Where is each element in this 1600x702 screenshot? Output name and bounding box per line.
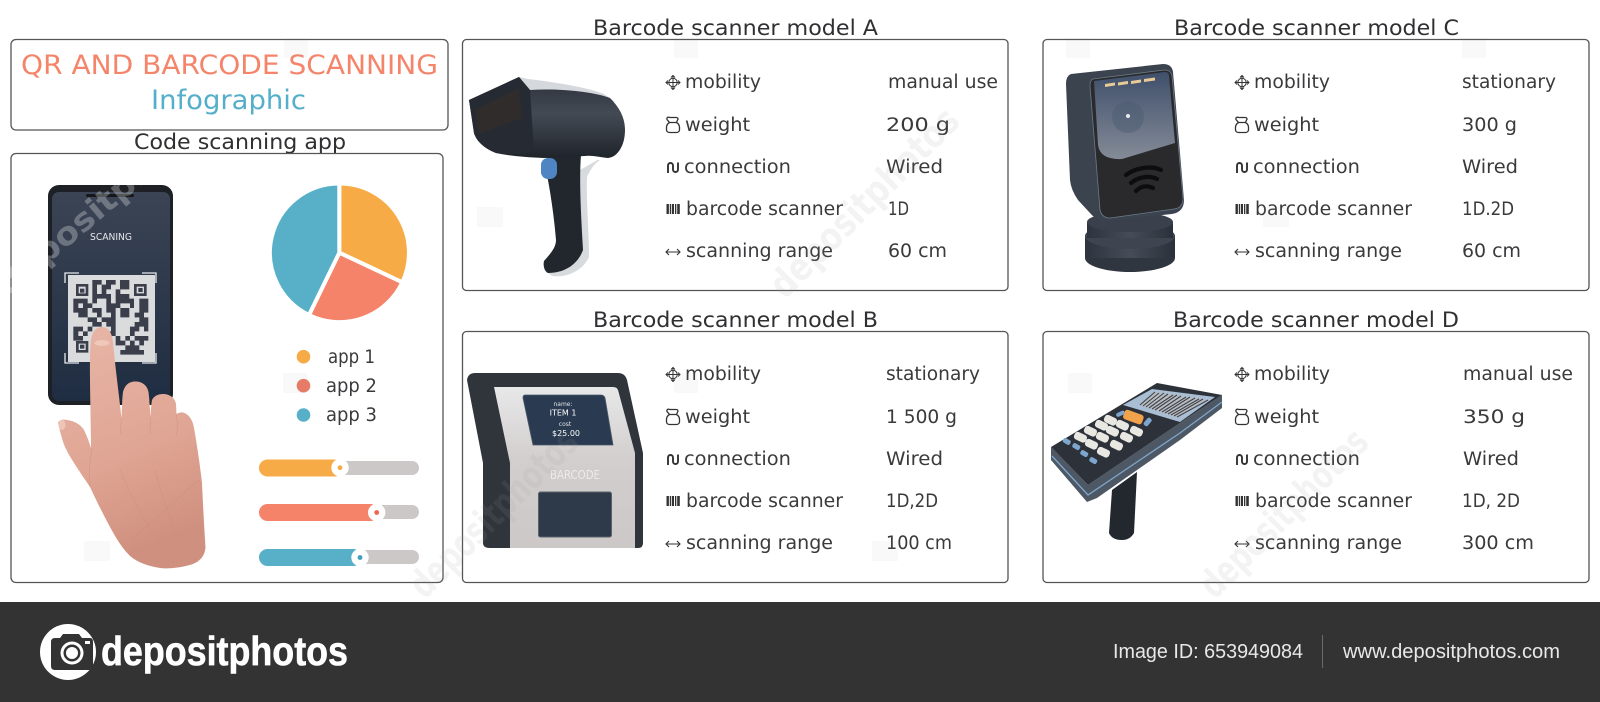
row: scanning range: 60 cm	[1462, 241, 1521, 262]
row: barcode scanner: barcode scanner	[1255, 199, 1412, 220]
pie slice: app 3	[270, 183, 339, 315]
contactless icon	[1126, 168, 1161, 191]
legend: app 1: app 1	[328, 347, 375, 368]
logo icon: camera	[40, 624, 96, 680]
row: connection: connection	[684, 449, 791, 470]
row: mobility	[666, 72, 998, 93]
legend	[297, 347, 377, 426]
row: weight: 200 g	[886, 115, 950, 136]
row: barcode scanner	[1236, 199, 1514, 220]
row: barcode scanner: barcode scanner	[1255, 491, 1412, 512]
row: barcode scanner	[666, 199, 909, 220]
illustration: mobile terminal	[1051, 383, 1222, 540]
row: weight	[666, 115, 950, 136]
row: scanning range: 60 cm	[888, 241, 947, 262]
LED strip	[1105, 78, 1155, 87]
legend: app 3: app 3	[326, 405, 377, 426]
silver top band	[519, 77, 614, 101]
spec rows	[666, 72, 998, 262]
watermark: depositphotos	[400, 420, 587, 606]
silver grip strip	[548, 160, 600, 276]
row: barcode scanner: 1D.2D	[1462, 199, 1514, 220]
row: mobility	[666, 364, 980, 385]
pie slice: app 1	[339, 183, 409, 282]
row: barcode scanner: barcode scanner	[686, 199, 843, 220]
panel: model A	[462, 40, 1008, 290]
row: mobility: mobility	[1254, 72, 1330, 93]
subtitle: Infographic	[151, 85, 306, 116]
row: connection: Wired	[886, 449, 943, 470]
row: weight: weight	[1254, 115, 1319, 136]
phone with qr code	[48, 185, 173, 405]
screen: $25.00	[552, 429, 580, 438]
row: weight: 300 g	[1462, 115, 1517, 136]
title panel	[11, 40, 448, 130]
watermark: depositphotos	[760, 98, 968, 306]
row: connection	[1237, 157, 1518, 178]
row: mobility: stationary	[886, 364, 980, 385]
pie chart	[270, 183, 409, 322]
row: weight: 1 500 g	[886, 407, 957, 428]
screen	[523, 395, 613, 445]
row: scanning range	[1235, 533, 1534, 554]
heading: model D: Barcode scanner model D	[1173, 308, 1459, 332]
row: weight: 350 g	[1463, 407, 1525, 428]
panel: model C	[1043, 40, 1589, 290]
hand	[58, 327, 206, 568]
row: weight: weight	[685, 407, 750, 428]
row: weight	[666, 407, 957, 428]
row: mobility: stationary	[1462, 72, 1556, 93]
slider: orange	[259, 459, 419, 476]
row: scanning range	[666, 241, 947, 262]
row: scanning range: 300 cm	[1462, 533, 1534, 554]
row: barcode scanner: 1D, 2D	[1462, 491, 1520, 512]
legend: app 2: app 2	[326, 376, 377, 397]
heading: model A: Barcode scanner model A	[593, 16, 879, 40]
website url: www.depositphotos.com	[1342, 641, 1560, 663]
row: barcode scanner	[1236, 491, 1520, 512]
row: weight: weight	[1254, 407, 1319, 428]
row: connection: Wired	[1462, 157, 1518, 178]
slider: salmon	[259, 504, 419, 521]
qr code	[65, 273, 156, 363]
row: mobility: mobility	[1254, 364, 1330, 385]
row: connection	[668, 157, 943, 178]
barcode label: BARCODE	[550, 468, 600, 482]
screen: cost	[559, 421, 572, 428]
row: barcode scanner: barcode scanner	[686, 491, 843, 512]
row: weight: weight	[685, 115, 750, 136]
row: mobility: manual use	[1463, 364, 1573, 385]
row: mobility	[1235, 72, 1556, 93]
row: connection	[1237, 449, 1519, 470]
slider: blue	[259, 549, 419, 566]
row: mobility	[1235, 364, 1573, 385]
heading: model B: Barcode scanner model B	[593, 308, 878, 332]
row: weight	[1236, 115, 1517, 136]
row: scanning range: scanning range	[686, 241, 833, 262]
spec rows	[1235, 72, 1556, 262]
row: weight	[1236, 407, 1525, 428]
row: connection: connection	[684, 157, 791, 178]
logo wordmark: depositphotos	[101, 628, 348, 674]
pie slice: app 2	[309, 253, 402, 322]
row: scanning range	[666, 533, 952, 554]
trigger	[541, 158, 557, 179]
row: barcode scanner	[666, 491, 938, 512]
main title: QR AND BARCODE SCANNING	[21, 50, 438, 81]
row: scanning range: scanning range	[686, 533, 833, 554]
watermark	[84, 38, 1486, 606]
heading: model C: Barcode scanner model C	[1174, 16, 1459, 40]
row: barcode scanner: 1D,2D	[886, 491, 938, 512]
function keys	[1062, 410, 1153, 465]
footer bar	[0, 602, 1600, 702]
panel: model D	[1043, 332, 1589, 582]
row: scanning range: scanning range	[1255, 533, 1402, 554]
illustration: desktop scanner	[1066, 64, 1184, 272]
row: connection: connection	[1253, 449, 1360, 470]
sliders	[259, 459, 419, 566]
illustration: handheld scanner	[469, 77, 625, 276]
image id: Image ID: 653949084	[1113, 641, 1303, 663]
row: mobility: mobility	[685, 364, 761, 385]
row: connection: connection	[1253, 157, 1360, 178]
screen: name:	[553, 401, 573, 408]
panel: code scanning app	[0, 149, 443, 582]
row: scanning range: 100 cm	[886, 533, 952, 554]
row: barcode scanner: 1D	[888, 199, 909, 220]
keypad	[1073, 409, 1144, 459]
device screen	[1123, 389, 1215, 422]
panel: model B	[462, 332, 1008, 582]
row: connection: Wired	[1463, 449, 1519, 470]
row: mobility: mobility	[685, 72, 761, 93]
screen: ITEM 1	[550, 408, 576, 418]
spec rows	[666, 364, 980, 554]
illustration: stationary scanner	[467, 373, 643, 548]
spec rows	[1235, 364, 1573, 554]
row: connection: Wired	[886, 157, 943, 178]
row: scanning range: scanning range	[1255, 241, 1402, 262]
row: mobility: manual use	[888, 72, 998, 93]
scan window	[538, 492, 612, 537]
row: scanning range	[1235, 241, 1521, 262]
heading: code scanning app: Code scanning app	[134, 130, 346, 154]
handle	[1109, 472, 1137, 540]
watermark: depositphotos	[1190, 420, 1377, 606]
row: connection	[668, 449, 943, 470]
scanning label: SCANING	[90, 232, 132, 243]
